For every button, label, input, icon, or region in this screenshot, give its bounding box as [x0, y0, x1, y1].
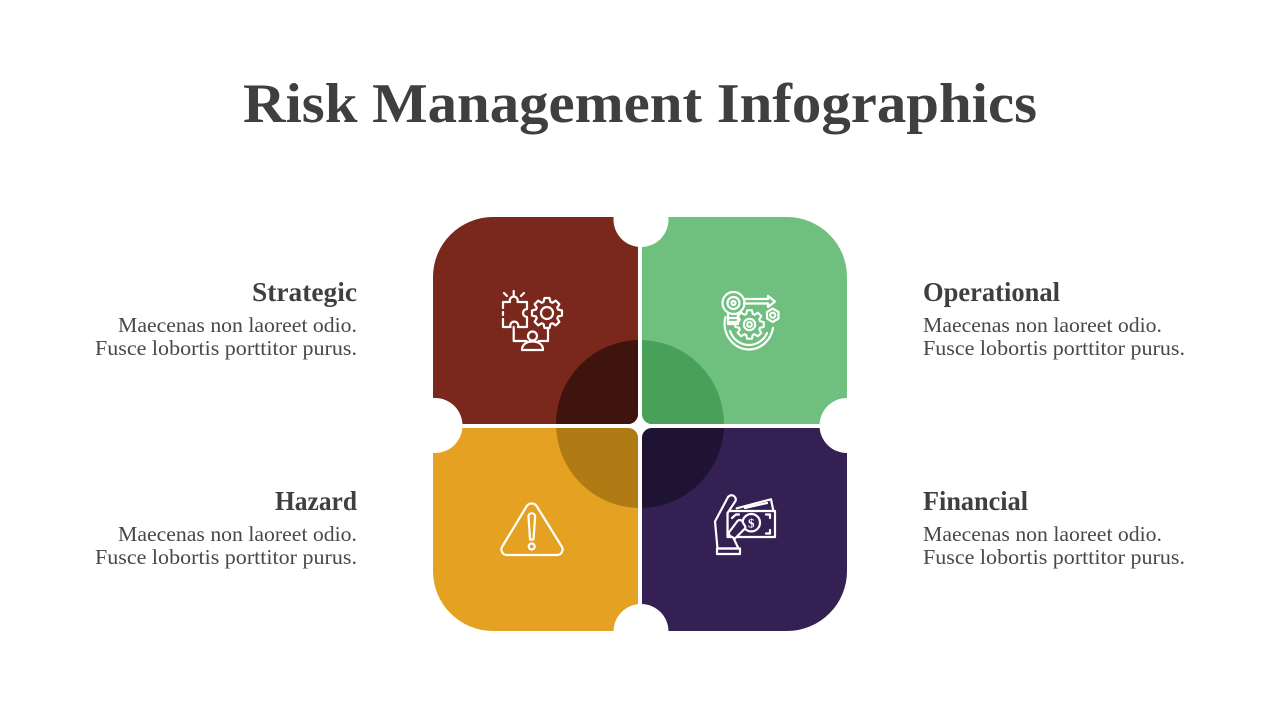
icon: hand holding money: $: [748, 515, 755, 530]
title: Risk Management Infographics: [243, 73, 1037, 135]
text block: financial: Maecenas non laoreet odio.: [923, 522, 1162, 546]
text block: hazard: Fusce lobortis porttitor purus.: [95, 545, 357, 569]
icon: bulb, gear and arrow: [722, 292, 778, 350]
text block: financial: Fusce lobortis porttitor purus.: [923, 545, 1185, 569]
text block: operational: Operational: [923, 277, 1060, 307]
text block: strategic: Strategic: [252, 277, 357, 307]
panel: strategic tile: [433, 217, 638, 424]
panel: hazard tile: [433, 428, 638, 631]
text block: hazard: Hazard: [275, 486, 357, 516]
text block: operational: Maecenas non laoreet odio.: [923, 313, 1162, 337]
panel: financial tile: [642, 428, 847, 631]
puzzle notches: [408, 192, 874, 659]
icon: puzzle, gear and person: [503, 291, 562, 350]
text block: financial: Financial: [923, 486, 1028, 516]
text block: financial: [923, 486, 1185, 569]
text block: hazard: [95, 486, 357, 569]
panel: operational tile: [642, 217, 847, 424]
text block: operational: [923, 277, 1185, 360]
text block: strategic: Fusce lobortis porttitor purus.: [95, 336, 357, 360]
text block: strategic: Maecenas non laoreet odio.: [118, 313, 357, 337]
text block: strategic: [95, 277, 357, 360]
text block: hazard: Maecenas non laoreet odio.: [118, 522, 357, 546]
icon: hand holding money: [715, 495, 775, 554]
text block: operational: Fusce lobortis porttitor purus.: [923, 336, 1185, 360]
icon: warning triangle: [501, 503, 563, 555]
